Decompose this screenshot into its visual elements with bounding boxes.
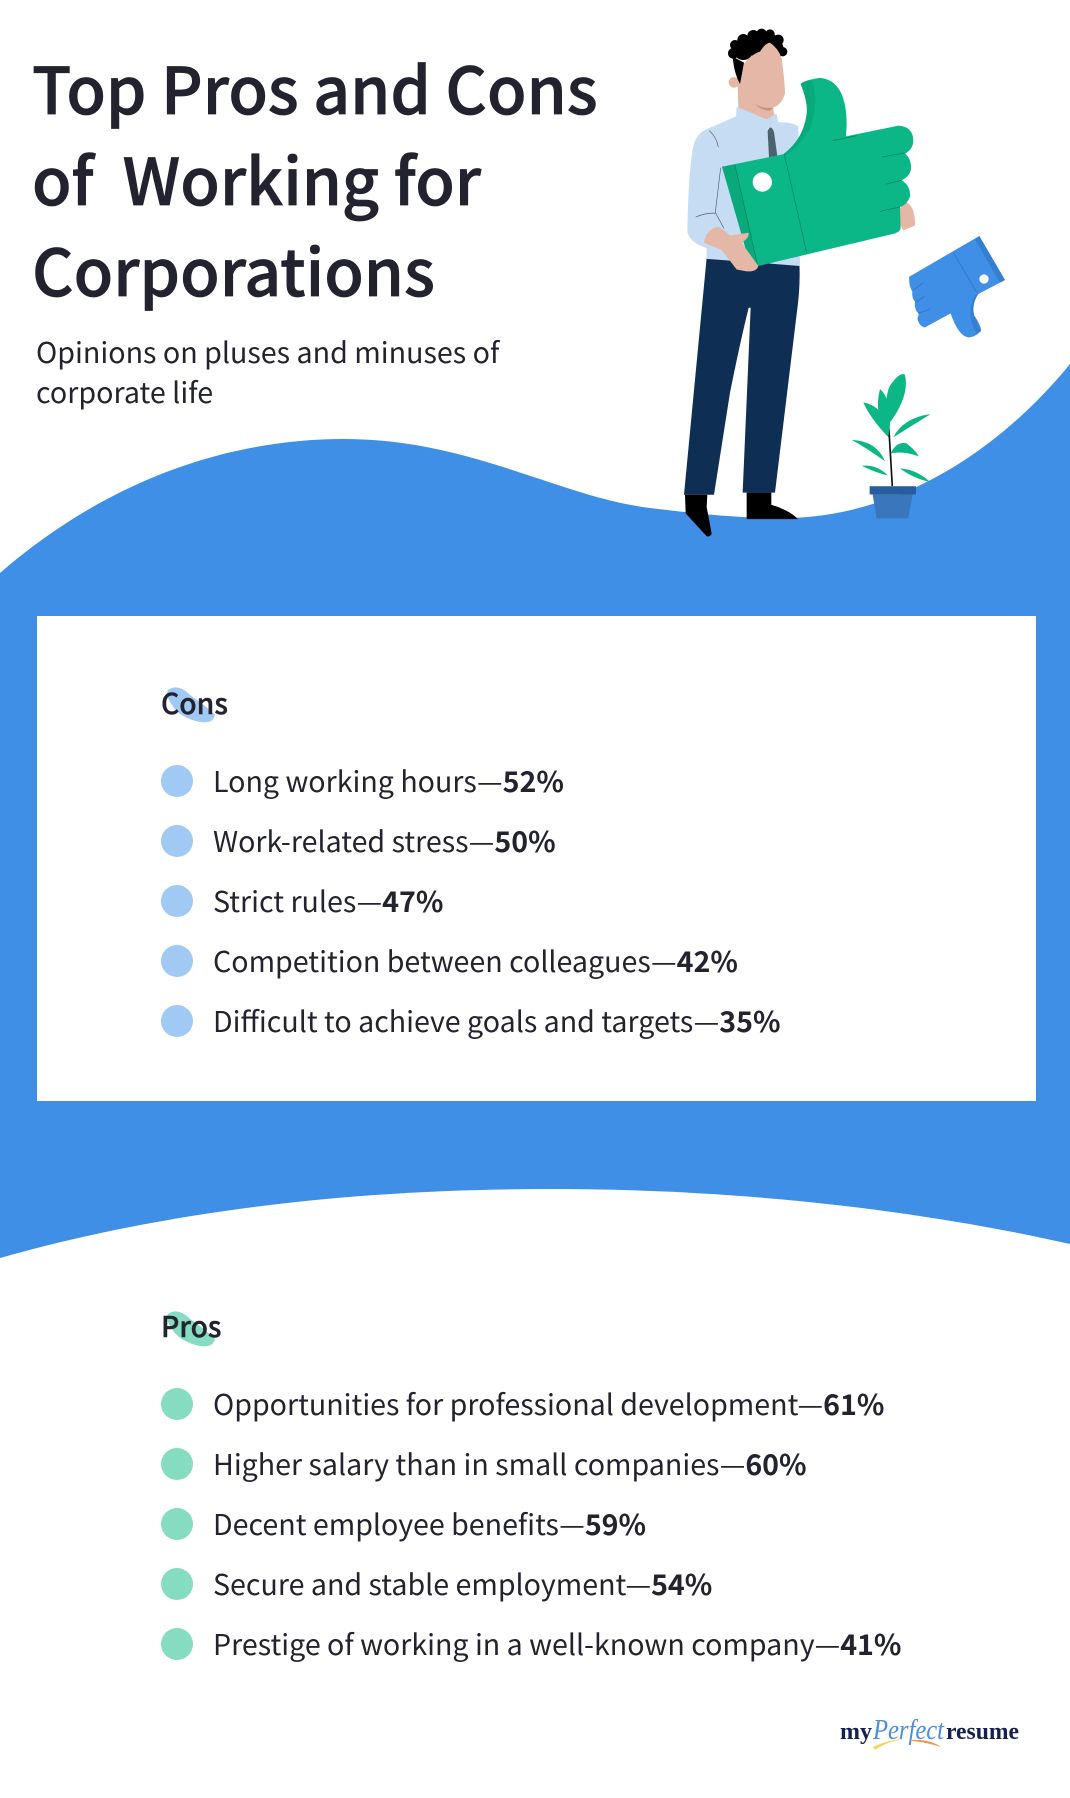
illustration: man holding thumbs up: [684, 29, 931, 536]
shirt folds: [696, 131, 724, 228]
subtitle: [36, 331, 501, 412]
white lower curve: [0, 1189, 1070, 1798]
thumbs down icon: [909, 236, 1005, 337]
cons list: Strict rules—47%: [213, 880, 443, 921]
blue wave background: [0, 364, 1070, 1300]
panel: pros: [161, 1305, 901, 1664]
pros list: Prestige of working in a well-known company—41%: [213, 1623, 901, 1664]
plant: [852, 374, 931, 518]
cons list: Competition between colleagues—42%: [213, 940, 738, 981]
cons list: [161, 760, 780, 1041]
panel: cons: [37, 616, 1036, 1101]
pros list: Opportunities for professional development—61%: [213, 1383, 884, 1424]
shirt: [687, 107, 800, 266]
cons heading: Cons: [161, 682, 228, 723]
pros heading: Pros: [161, 1305, 222, 1346]
shoes: [685, 493, 798, 536]
head and hair: [728, 29, 787, 119]
cons list: Difficult to achieve goals and targets—35%: [213, 1000, 780, 1041]
logo: [840, 1714, 1019, 1750]
fingers behind thumb: [899, 202, 915, 230]
trousers: [684, 258, 800, 495]
title: Top Pros and Cons: [32, 39, 598, 133]
left hand: [704, 227, 758, 271]
title: of Working for: [32, 130, 482, 224]
pot: [873, 494, 913, 518]
tie: [768, 127, 777, 157]
pros list: Higher salary than in small companies—60%: [213, 1443, 807, 1484]
cons list: Work-related stress—50%: [213, 820, 556, 861]
pros list: Decent employee benefits—59%: [213, 1503, 646, 1544]
logo: resume: [946, 1719, 1019, 1745]
thumbs up icon: [722, 78, 913, 266]
subtitle: corporate life: [36, 371, 213, 412]
pros list: Secure and stable employment—54%: [213, 1563, 712, 1604]
title: Corporations: [32, 221, 435, 315]
cons list: Long working hours—52%: [213, 760, 564, 801]
logo: my: [840, 1719, 872, 1745]
pros list: [161, 1383, 901, 1664]
subtitle: Opinions on pluses and minuses of: [36, 331, 501, 372]
title: [32, 39, 598, 315]
logo: Perfect: [872, 1714, 945, 1746]
